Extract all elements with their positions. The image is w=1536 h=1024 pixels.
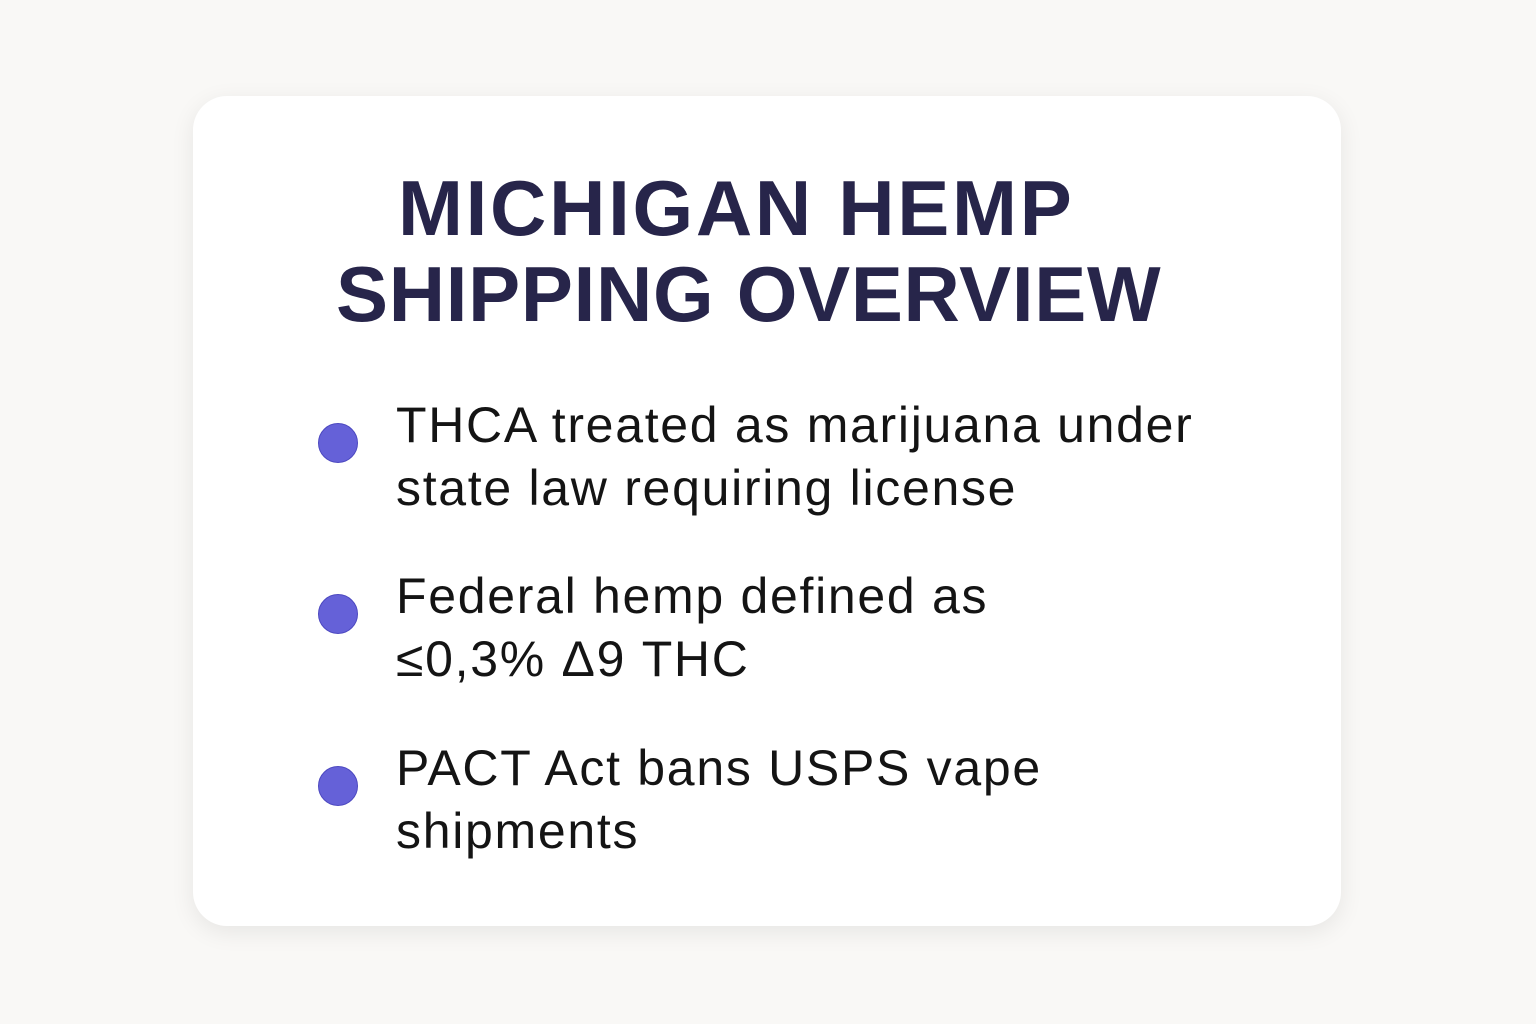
title: MICHIGAN HEMP [398, 164, 1074, 252]
text 1: state law requiring license [396, 460, 1017, 516]
bullet 3 [318, 766, 358, 806]
bullet 1 [318, 423, 358, 463]
title [336, 164, 1161, 338]
text 3: PACT Act bans USPS vape [396, 740, 1042, 796]
text 2: Federal hemp defined as [396, 568, 988, 624]
text 2 [396, 568, 988, 687]
card panel [193, 96, 1341, 926]
text 2: ≤0,3% Δ9 THC [396, 631, 750, 687]
text 3 [396, 740, 1042, 859]
text 1: THCA treated as marijuana under [396, 397, 1194, 453]
text 3: shipments [396, 803, 639, 859]
text 1 [396, 397, 1194, 516]
bullet 2 [318, 594, 358, 634]
title: SHIPPING OVERVIEW [336, 250, 1161, 338]
